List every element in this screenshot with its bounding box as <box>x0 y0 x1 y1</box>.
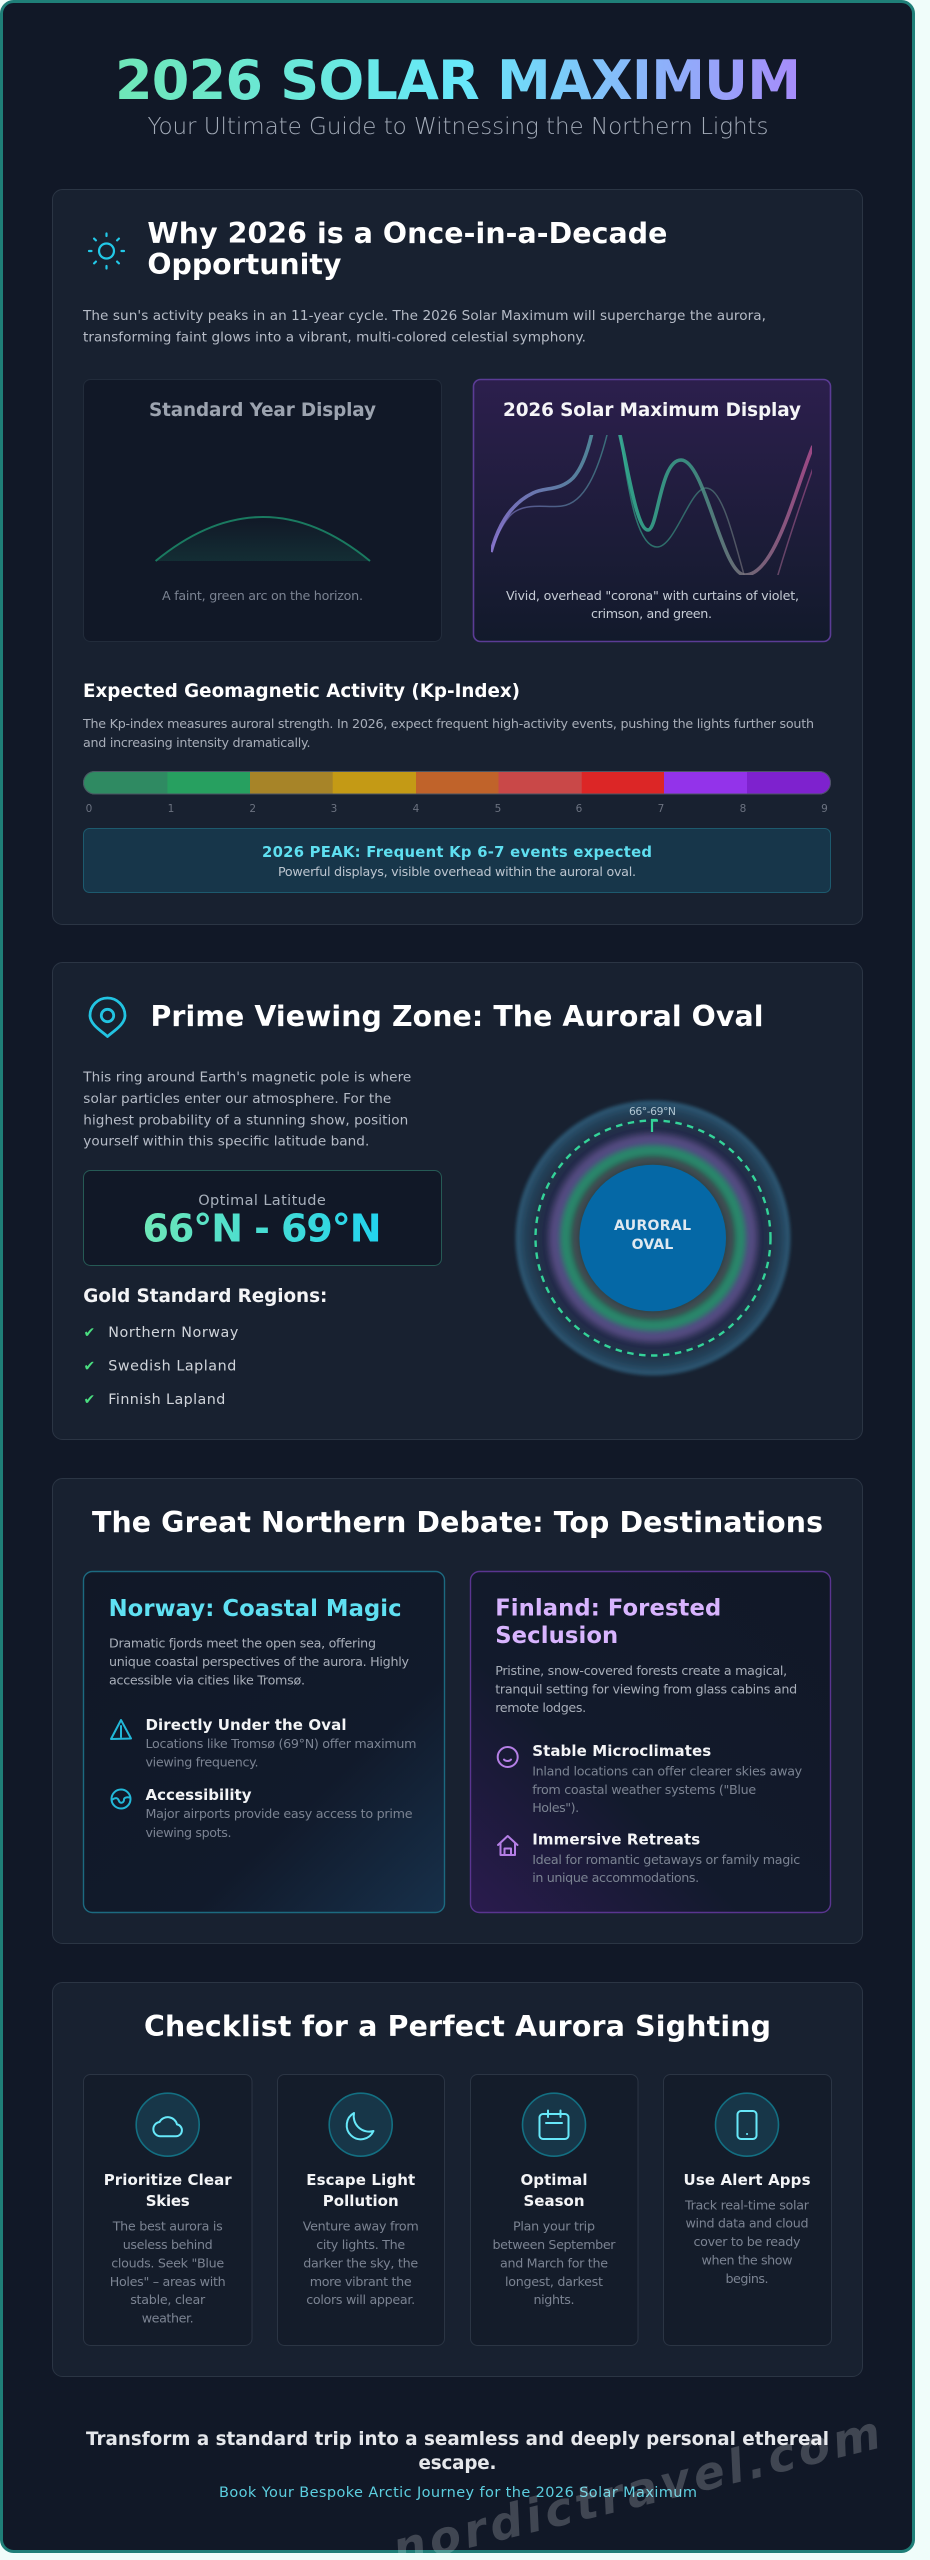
card text: nights. <box>534 2292 574 2307</box>
feature: stable microclimates: Stable Microclimates <box>532 1742 711 1760</box>
auroral oval diagram: AURORAL <box>614 1218 691 1234</box>
heading: Checklist for a Perfect Aurora Sighting <box>144 2010 771 2043</box>
card text: Pollution <box>323 2192 399 2210</box>
heading: Opportunity <box>147 248 341 281</box>
auroral oval diagram: 66°-69°N <box>629 1105 676 1118</box>
heading <box>147 217 667 281</box>
kp scale labels: 8 <box>740 803 746 815</box>
card: optimal season <box>470 2074 638 2346</box>
kp scale labels: 9 <box>821 803 828 815</box>
icon: phone <box>738 2111 756 2139</box>
footer <box>86 2429 829 2501</box>
card text: Optimal <box>520 2171 588 2189</box>
card heading: 2026 Solar Maximum Display <box>503 400 801 421</box>
feature: stable microclimates: Holes"). <box>532 1800 579 1815</box>
caption: Vivid, overhead "corona" with curtains of violet, <box>506 588 799 603</box>
feature: directly under the oval <box>146 1716 416 1770</box>
icon: house <box>498 1836 518 1855</box>
feature: stable microclimates: from coastal weather systems ("Blue <box>532 1782 756 1797</box>
kp scale labels: 7 <box>658 803 664 815</box>
card text: remote lodges. <box>495 1700 586 1715</box>
callout: peak <box>84 828 830 892</box>
card heading: Standard Year Display <box>149 400 376 421</box>
kp scale labels: 1 <box>168 803 174 815</box>
feature: accessibility: Major airports provide easy access to prime <box>146 1806 413 1821</box>
kp description: and increasing intensity dramatically. <box>83 735 310 750</box>
icon: location pin <box>90 998 125 1036</box>
auroral oval diagram <box>516 1100 790 1376</box>
feature: directly under the oval: viewing frequency. <box>146 1755 258 1770</box>
card heading: Norway: Coastal Magic <box>109 1596 402 1622</box>
feature: immersive retreats <box>532 1831 800 1885</box>
panel: prime viewing zone <box>52 962 862 1440</box>
card text: city lights. The <box>316 2237 405 2252</box>
card text: unique coastal perspectives of the aurora. Highly <box>109 1654 409 1669</box>
feature: stable microclimates: Inland locations can offer clearer skies away <box>532 1764 803 1779</box>
card text <box>104 2171 232 2326</box>
intro text <box>82 308 766 346</box>
regions list <box>84 1325 239 1408</box>
card heading: Seclusion <box>495 1623 618 1649</box>
subtitle: Your Ultimate Guide to Witnessing the Northern Lights <box>148 114 768 140</box>
card text: Escape Light <box>306 2171 415 2189</box>
card text: when the show <box>702 2252 792 2268</box>
card text: darker the sky, the <box>303 2256 418 2270</box>
card text: cover to be ready <box>694 2234 801 2249</box>
description: This ring around Earth's magnetic pole is where <box>82 1070 411 1086</box>
card text <box>109 1636 409 1688</box>
card text <box>492 2171 616 2307</box>
callout: peak: 2026 PEAK: Frequent Kp 6-7 events expected <box>262 844 652 861</box>
footer: Transform a standard trip into a seamless and deeply personal ethereal <box>86 2429 829 2450</box>
caption <box>506 588 799 621</box>
kp scale labels: 4 <box>413 803 420 815</box>
card: clear skies <box>84 2074 252 2346</box>
icon: accessibility <box>112 1790 130 1808</box>
faint arc illustration <box>156 517 370 561</box>
feature: directly under the oval: Directly Under the Oval <box>146 1716 346 1734</box>
card text: Season <box>524 2192 584 2210</box>
card: finland <box>470 1572 830 1912</box>
kp scale labels: 6 <box>576 803 583 815</box>
panel: destinations <box>52 1478 862 1944</box>
regions list: ✔ <box>84 1392 95 1408</box>
regions list: Swedish Lapland <box>108 1358 236 1374</box>
regions list: Northern Norway <box>108 1325 239 1341</box>
icon: triangle <box>111 1720 131 1739</box>
footer: Book Your Bespoke Arctic Journey for the 2026 Solar Maximum <box>219 2485 697 2501</box>
card text: Venture away from <box>303 2219 419 2234</box>
kp heading: Expected Geomagnetic Activity (Kp-Index) <box>83 681 520 702</box>
heading: Prime Viewing Zone: The Auroral Oval <box>150 1000 764 1033</box>
icon: smile <box>498 1747 518 1767</box>
regions list: ✔ <box>84 1358 95 1374</box>
card text: Track real-time solar <box>684 2197 810 2212</box>
card text: more vibrant the <box>310 2274 412 2289</box>
intro text: The sun's activity peaks in an 11-year cycle. The 2026 Solar Maximum will supercharge the aurora, <box>82 308 766 324</box>
intro text: transforming faint glows into a vibrant, multi-colored celestial symphony. <box>83 330 586 346</box>
card text: Skies <box>146 2192 190 2210</box>
card text: Use Alert Apps <box>684 2171 811 2189</box>
kp bar <box>83 771 831 795</box>
description: highest probability of a stunning show, position <box>83 1112 408 1128</box>
card text: useless behind <box>123 2237 213 2252</box>
stat box: optimal latitude: Optimal Latitude <box>198 1193 326 1209</box>
heading: The Great Northern Debate: Top Destinations <box>92 1506 823 1539</box>
card text: longest, darkest <box>505 2274 603 2289</box>
card text: between September <box>492 2237 616 2252</box>
card text: tranquil setting for viewing from glass cabins and <box>495 1682 797 1696</box>
card: standard year <box>84 380 442 642</box>
card text <box>684 2171 811 2286</box>
panel: why 2026 <box>52 190 862 924</box>
title: 2026 SOLAR MAXIMUM <box>115 49 801 112</box>
feature: directly under the oval: Locations like Tromsø (69°N) offer maximum <box>146 1736 416 1751</box>
feature: accessibility: viewing spots. <box>146 1825 232 1840</box>
feature: stable microclimates <box>532 1742 803 1815</box>
card text: Plan your trip <box>513 2219 595 2234</box>
feature: immersive retreats: Immersive Retreats <box>532 1831 700 1849</box>
auroral oval diagram: OVAL <box>632 1237 673 1253</box>
regions heading: Gold Standard Regions: <box>83 1286 327 1307</box>
aurora curves <box>491 435 812 575</box>
card text: clouds. Seek "Blue <box>111 2256 224 2270</box>
footer: escape. <box>418 2453 496 2474</box>
card text <box>303 2171 419 2307</box>
icon: sun <box>89 234 124 268</box>
kp scale labels: 5 <box>495 803 501 815</box>
card text: begins. <box>726 2271 768 2286</box>
description: solar particles enter our atmosphere. For the <box>83 1091 391 1107</box>
card text: weather. <box>142 2310 194 2326</box>
feature: immersive retreats: in unique accommodations. <box>532 1870 699 1885</box>
card text: Pristine, snow-covered forests create a magical, <box>495 1663 787 1678</box>
kp scale labels: 0 <box>86 803 92 815</box>
kp description: The Kp-index measures auroral strength. In 2026, expect frequent high-activity events, pushing the lights further south <box>82 716 814 731</box>
kp scale labels <box>86 803 828 815</box>
heading: Why 2026 is a Once-in-a-Decade <box>147 217 667 250</box>
card text: accessible via cities like Tromsø. <box>109 1672 305 1688</box>
kp description <box>82 716 814 750</box>
card text: colors will appear. <box>306 2292 415 2307</box>
description <box>82 1070 411 1150</box>
icon: cloud <box>153 2117 182 2136</box>
feature: accessibility: Accessibility <box>146 1786 252 1804</box>
feature: immersive retreats: Ideal for romantic getaways or family magic <box>532 1852 800 1867</box>
card: solar maximum <box>474 380 830 642</box>
caption: A faint, green arc on the horizon. <box>162 588 363 603</box>
card text: Prioritize Clear <box>104 2171 232 2189</box>
card: light pollution <box>278 2074 444 2346</box>
card heading <box>495 1596 721 1649</box>
stat box: optimal latitude <box>84 1170 442 1266</box>
kp scale labels: 2 <box>249 803 256 815</box>
icon: moon <box>347 2113 374 2139</box>
description: yourself within this specific latitude band. <box>83 1134 369 1150</box>
stat box: optimal latitude: 66°N - 69°N <box>142 1207 382 1251</box>
card text: Dramatic fjords meet the open sea, offering <box>109 1636 376 1651</box>
feature: accessibility <box>146 1786 413 1840</box>
arc line <box>156 517 370 561</box>
card text: The best aurora is <box>112 2219 223 2234</box>
card text: stable, clear <box>130 2292 206 2307</box>
card heading: Finland: Forested <box>495 1596 721 1622</box>
callout: peak: Powerful displays, visible overhead within the auroral oval. <box>278 864 636 879</box>
caption: crimson, and green. <box>591 606 712 621</box>
panel: checklist <box>52 1982 862 2376</box>
icon: calendar <box>540 2110 568 2139</box>
card text: Holes" – areas with <box>110 2274 226 2289</box>
regions list: Finnish Lapland <box>108 1392 225 1408</box>
card: alert apps <box>664 2074 832 2346</box>
kp scale labels: 3 <box>331 803 337 815</box>
regions list: ✔ <box>84 1325 95 1341</box>
card: norway <box>84 1572 444 1912</box>
card text: and March for the <box>500 2256 608 2270</box>
card text <box>495 1663 797 1715</box>
header <box>115 49 801 140</box>
card text: wind data and cloud <box>686 2216 808 2231</box>
